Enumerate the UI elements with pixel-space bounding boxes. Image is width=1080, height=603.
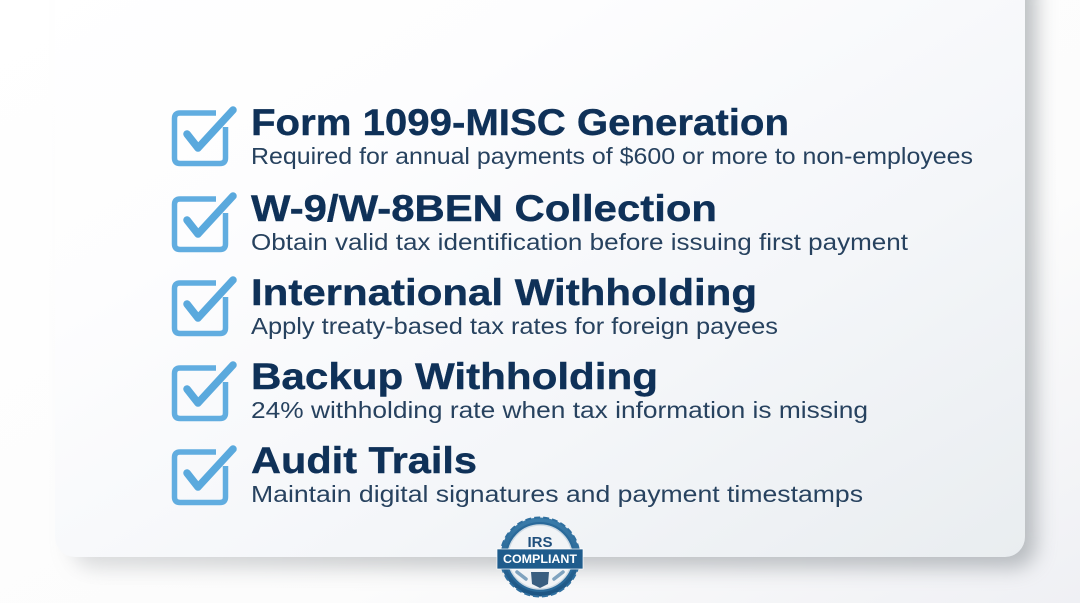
description: Obtain valid tax identification before issuing first payment [251, 229, 909, 255]
seal: ribbon [497, 549, 583, 569]
heading: W-9/W-8BEN Collection [251, 188, 717, 229]
seal: laurels [517, 572, 563, 579]
seal: eagle emblem [531, 572, 549, 588]
icon: checkbox [174, 280, 233, 334]
icon: checkbox [174, 196, 233, 250]
description: Apply treaty-based tax rates for foreign payees [251, 313, 778, 339]
heading: Backup Withholding [251, 356, 658, 397]
icon: checkbox [174, 449, 233, 502]
item: Audit Trails [174, 440, 863, 507]
item: Backup Withholding [174, 356, 868, 423]
description: Maintain digital signatures and payment timestamps [251, 481, 863, 507]
seal: COMPLIANT text: COMPLIANT [503, 554, 577, 566]
icon: checkbox [174, 365, 233, 418]
heading: Form 1099-MISC Generation [251, 102, 789, 143]
description: Required for annual payments of $600 or more to non-employees [251, 143, 973, 169]
heading: International Withholding [251, 272, 757, 313]
seal: IRS text: IRS [527, 534, 553, 551]
item: W-9/W-8BEN Collection [174, 188, 909, 255]
heading: Audit Trails [251, 440, 477, 481]
item: Form 1099-MISC Generation [174, 102, 973, 169]
item: International Withholding [174, 272, 778, 339]
icon: checkbox [174, 110, 233, 164]
badge: IRS Compliant seal [497, 518, 583, 596]
description: 24% withholding rate when tax information is missing [251, 397, 868, 423]
